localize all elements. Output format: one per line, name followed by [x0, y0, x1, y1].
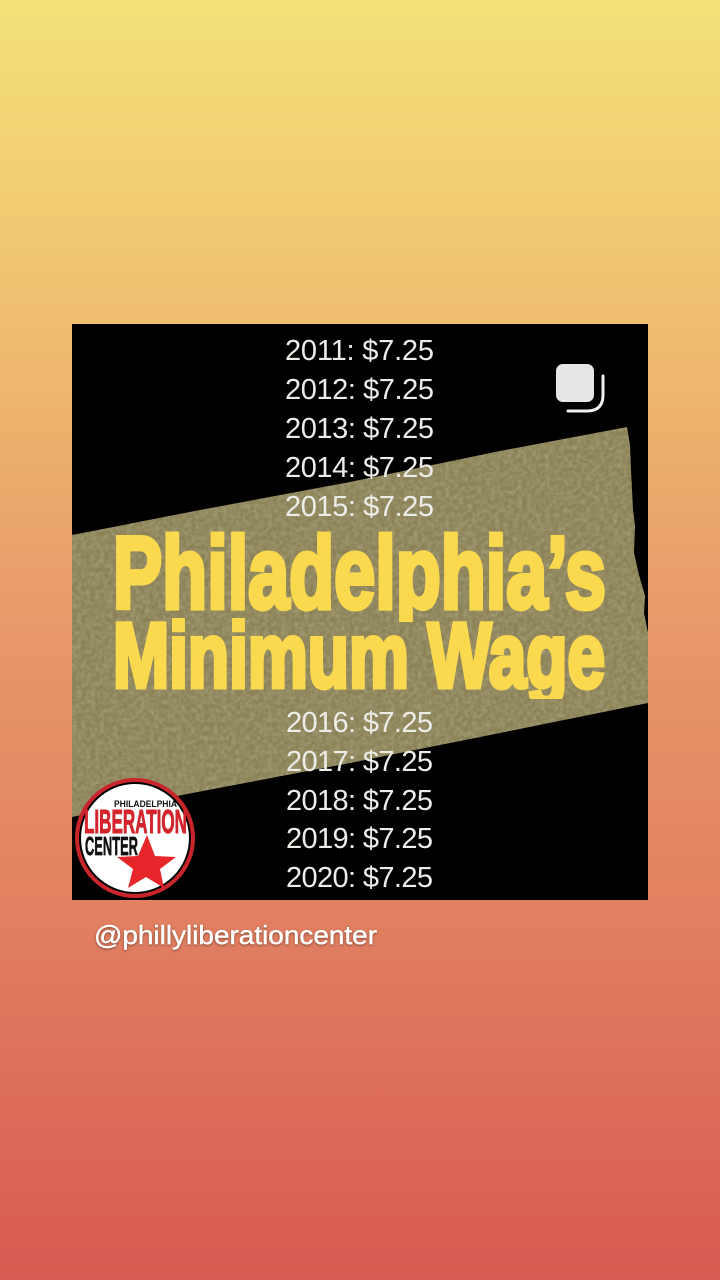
years 2016 to 2020: 2017: $7.25 [286, 746, 433, 778]
logo: Philadelphia Liberation Center: PHILADELPHIA [114, 799, 177, 809]
tape strip [72, 427, 648, 817]
years 2016 to 2020: 2019: $7.25 [286, 823, 433, 855]
years 2011 to 2015: 2014: $7.25 [285, 452, 434, 484]
years 2011 to 2015: 2012: $7.25 [285, 374, 434, 406]
title [116, 532, 605, 699]
logo: Philadelphia Liberation Center [75, 778, 195, 898]
logo: Philadelphia Liberation Center: LIBERATION [84, 803, 187, 840]
years 2016 to 2020: 2020: $7.25 [286, 862, 433, 894]
years 2011 to 2015: 2013: $7.25 [285, 413, 434, 445]
years 2011 to 2015 [285, 335, 434, 523]
years 2016 to 2020: 2016: $7.25 [286, 707, 433, 739]
years 2011 to 2015: 2015: $7.25 [285, 491, 434, 523]
years 2011 to 2015: 2011: $7.25 [285, 335, 434, 367]
handle caption: @phillyliberationcenter [94, 920, 377, 950]
infographic canvas [72, 324, 648, 952]
years 2016 to 2020 [286, 707, 433, 894]
panel: black square post [72, 324, 648, 900]
years 2016 to 2020: 2018: $7.25 [286, 785, 433, 817]
icon: multiple posts [556, 364, 603, 411]
logo: Philadelphia Liberation Center: CENTER [85, 831, 138, 861]
